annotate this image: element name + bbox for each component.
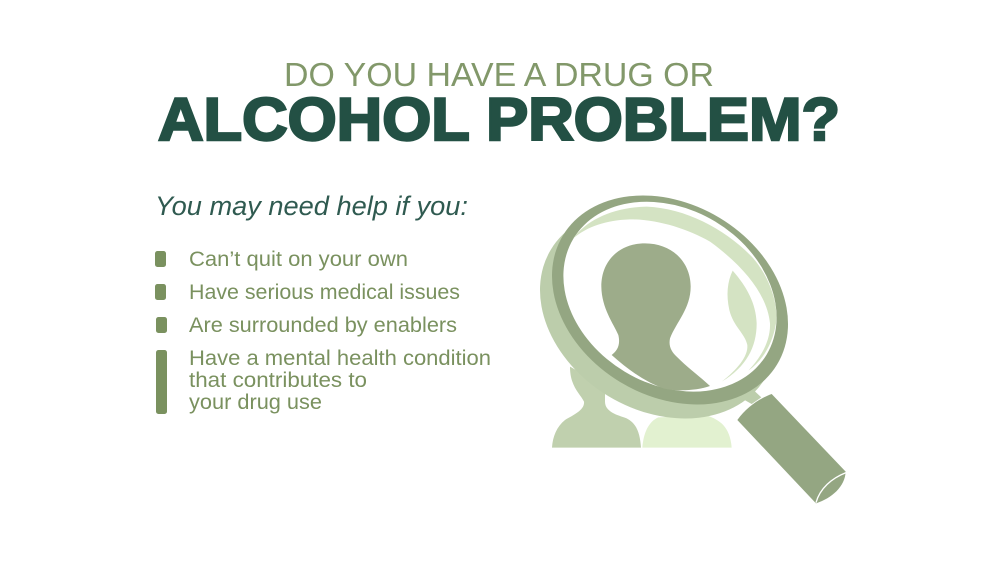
list item: quit: Can’t quit on your own <box>189 248 408 271</box>
icon: handle end highlight <box>816 473 846 503</box>
icon: lens glass <box>528 163 812 430</box>
list item: medical: Have serious medical issues <box>189 281 460 304</box>
icon: glass reflection leaf <box>722 271 757 382</box>
subheading: You may need help if you: <box>155 191 468 221</box>
icon: handle connector <box>742 388 761 404</box>
icon: lens body <box>501 167 815 461</box>
list item: mental health: that contributes to <box>189 369 367 392</box>
title line 2: ALCOHOL PROBLEM? <box>158 86 840 153</box>
title line 1: DO YOU HAVE A DRUG OR <box>284 56 714 93</box>
list item: mental health: your drug use <box>189 391 322 414</box>
icon: left person shoulders <box>552 367 641 448</box>
icon: glass highlight band <box>573 207 776 371</box>
icon: handle <box>737 394 846 503</box>
icon: lens rim <box>513 153 827 447</box>
icon: right person shoulders <box>642 415 732 448</box>
icon: magnified person <box>601 243 710 390</box>
list item: enablers: Are surrounded by enablers <box>189 314 457 337</box>
title <box>158 56 840 153</box>
list item: mental health: Have a mental health condition <box>189 347 491 370</box>
illustration: magnifying glass over people <box>501 153 846 503</box>
list item: mental health <box>156 347 491 414</box>
checklist <box>155 248 491 414</box>
